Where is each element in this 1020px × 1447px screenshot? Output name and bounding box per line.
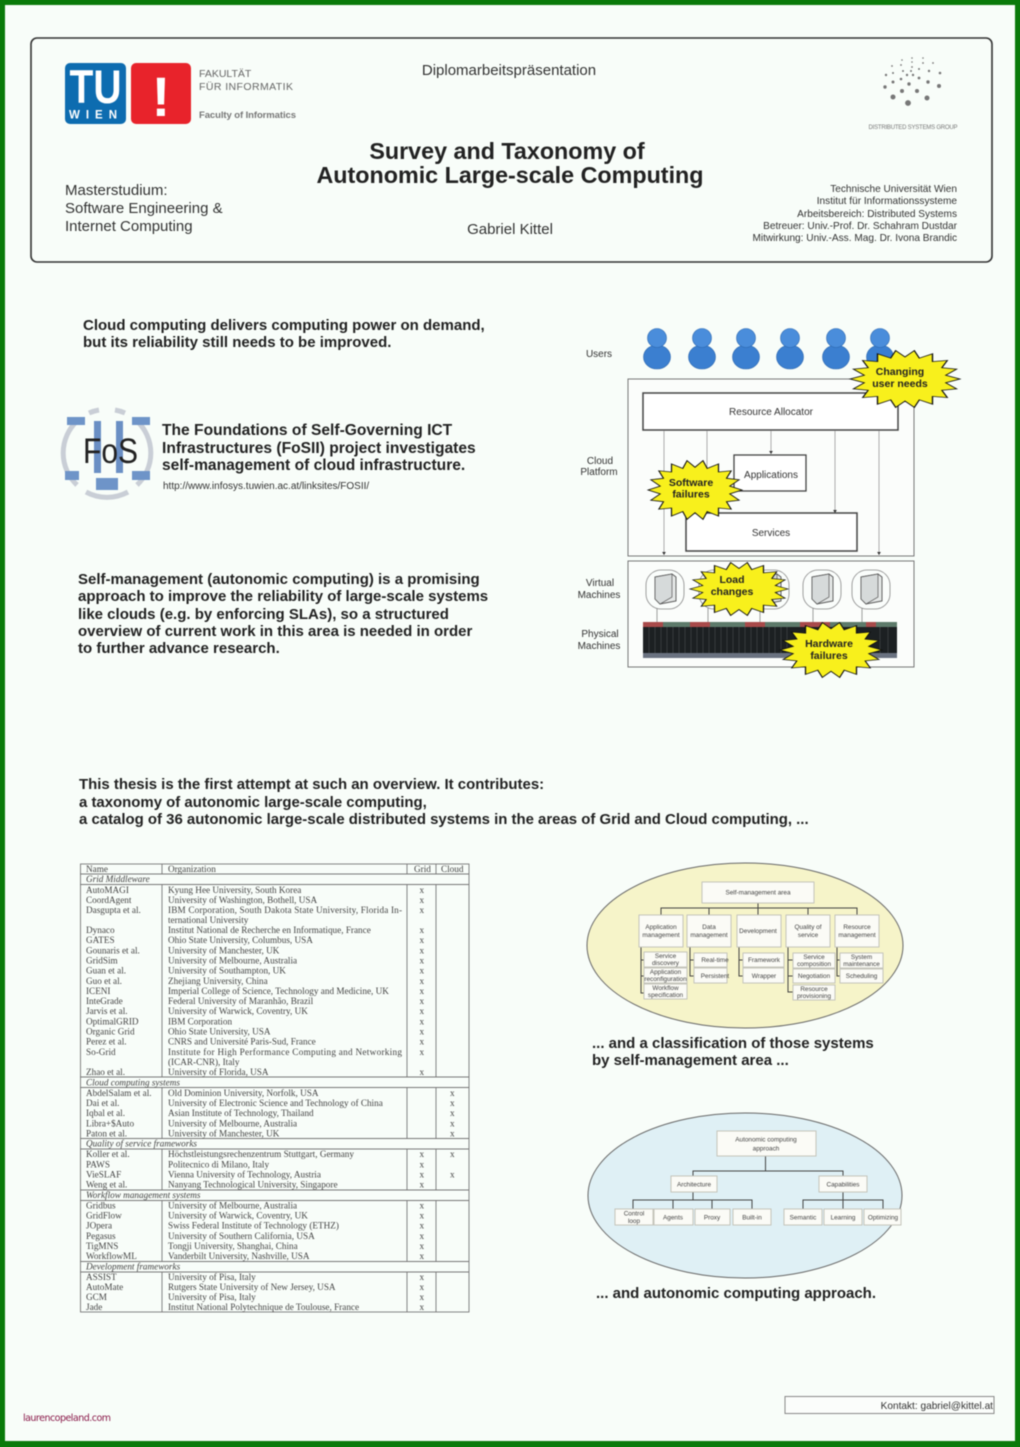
capabilities items: Learning bbox=[831, 1214, 856, 1222]
category boxes: Quality of bbox=[794, 924, 822, 931]
section: cloud computing systems: Asian Institute of Technology, Thailand bbox=[168, 1108, 314, 1118]
intro text: but its reliability still needs to be improved. bbox=[83, 334, 391, 351]
category boxes: management bbox=[838, 932, 876, 939]
callout: hardware failures: Hardware bbox=[805, 638, 853, 650]
self-management text: like clouds (e.g. by enforcing SLAs), so a structured bbox=[78, 606, 449, 623]
section: grid middleware: Ohio State University, Columbus, USA bbox=[168, 935, 313, 945]
application management items: specification bbox=[648, 992, 684, 999]
section: grid middleware: x bbox=[420, 1016, 424, 1026]
architecture items: loop bbox=[628, 1218, 640, 1225]
section: workflow management systems: University of Melbourne, Australia bbox=[168, 1200, 297, 1210]
root box bbox=[717, 1131, 816, 1156]
application management items: Workflow bbox=[652, 985, 679, 992]
section: development frameworks: AutoMate bbox=[86, 1282, 123, 1292]
section: cloud computing systems: Libra+$Auto bbox=[86, 1118, 134, 1128]
section: workflow management systems: x bbox=[420, 1210, 424, 1220]
FoSII project description: self-management of cloud infrastructure. bbox=[162, 457, 465, 474]
section: cloud computing systems: Iqbal et al. bbox=[86, 1108, 125, 1118]
section: development frameworks: x bbox=[420, 1272, 424, 1282]
panel: cloud platform bbox=[628, 379, 914, 556]
quality of service items: provisioning bbox=[797, 993, 831, 1000]
section: grid middleware: IBM Corporation, South Dakota State University, Florida In- bbox=[168, 905, 402, 915]
category boxes: management bbox=[690, 932, 728, 939]
branch boxes: Capabilities bbox=[826, 1182, 860, 1188]
application management items: discovery bbox=[652, 960, 680, 967]
title bbox=[316, 138, 704, 188]
row labels: Machines bbox=[578, 590, 620, 601]
institute and supervisors: Mitwirkung: Univ.-Ass. Mag. Dr. Ivona Brandic bbox=[752, 233, 957, 244]
intro text: Cloud computing delivers computing power on demand, bbox=[83, 317, 485, 334]
section: grid middleware: Grid Middleware bbox=[86, 874, 150, 884]
section: cloud computing systems: University of Manchester, UK bbox=[168, 1128, 280, 1138]
section: quality of service frameworks: x bbox=[450, 1149, 455, 1159]
section: quality of service frameworks: x bbox=[420, 1170, 424, 1180]
section: grid middleware: University of Washington, Bothell, USA bbox=[168, 895, 318, 905]
section: cloud computing systems bbox=[86, 1078, 455, 1138]
resource management items bbox=[840, 953, 883, 983]
section: quality of service frameworks: x bbox=[420, 1180, 424, 1190]
section: grid middleware: x bbox=[420, 946, 424, 956]
title: Autonomic Large-scale Computing bbox=[316, 162, 704, 188]
section: quality of service frameworks: Weng et al. bbox=[86, 1180, 127, 1190]
category boxes bbox=[639, 915, 879, 947]
section: grid middleware: Kyung Hee University, South Korea bbox=[168, 885, 301, 895]
section: development frameworks: Institut National Polytechnique de Toulouse, France bbox=[168, 1302, 359, 1312]
section: workflow management systems: JOpera bbox=[86, 1220, 112, 1230]
study programme: Masterstudium: bbox=[65, 182, 168, 199]
section: grid middleware: Dasgupta et al. bbox=[86, 905, 141, 915]
category boxes: Development bbox=[739, 928, 777, 935]
faculty name: FÜR INFORMATIK bbox=[199, 81, 293, 93]
section: grid middleware: OptimalGRID bbox=[86, 1016, 139, 1026]
section: grid middleware: x bbox=[420, 935, 424, 945]
section: workflow management systems: x bbox=[420, 1231, 424, 1241]
table: catalog of systems bbox=[80, 864, 469, 1312]
self-management text: approach to improve the reliability of large-scale systems bbox=[78, 588, 488, 605]
section: grid middleware: Federal University of Maranhão, Brazil bbox=[168, 996, 314, 1006]
section: grid middleware: University of Warwick, Coventry, UK bbox=[168, 1006, 308, 1016]
section: grid middleware: Zhao et al. bbox=[86, 1067, 125, 1077]
section: cloud computing systems: University of Electronic Science and Technology of China bbox=[168, 1098, 383, 1108]
section: development frameworks: Development frameworks bbox=[85, 1262, 181, 1272]
section: development frameworks: ASSIST bbox=[86, 1272, 117, 1282]
section: quality of service frameworks: Koller et al. bbox=[86, 1149, 130, 1159]
capabilities items bbox=[784, 1209, 901, 1225]
table grid bbox=[80, 864, 469, 1312]
section: grid middleware: x bbox=[420, 966, 424, 976]
section: development frameworks bbox=[85, 1262, 424, 1312]
section: development frameworks: Jade bbox=[86, 1302, 102, 1312]
section: workflow management systems: TigMNS bbox=[86, 1241, 118, 1251]
data management items: Real-time bbox=[701, 957, 729, 964]
callout: load changes: Load bbox=[719, 574, 745, 586]
section: quality of service frameworks bbox=[86, 1138, 455, 1190]
section: development frameworks: x bbox=[420, 1282, 424, 1292]
section: grid middleware: (ICAR-CNR), Italy bbox=[168, 1057, 240, 1067]
table header: Organization bbox=[168, 864, 216, 874]
callout: hardware failures: failures bbox=[810, 650, 848, 662]
caption: classification: ... and a classification of those systems bbox=[592, 1035, 874, 1052]
section: grid middleware: IBM Corporation bbox=[168, 1016, 232, 1026]
thesis contribution text bbox=[79, 776, 809, 828]
section: cloud computing systems: Dai et al. bbox=[86, 1098, 119, 1108]
panel: cloud platform: Applications bbox=[744, 470, 798, 481]
caption: classification bbox=[592, 1035, 874, 1069]
row labels: Machines bbox=[578, 641, 620, 652]
watermark: laurencopeland.com bbox=[23, 1413, 111, 1424]
caption: classification: by self-management area ... bbox=[592, 1052, 789, 1069]
section: cloud computing systems: x bbox=[450, 1088, 455, 1098]
section: grid middleware: Dynaco bbox=[86, 925, 115, 935]
panel: cloud platform: Services bbox=[752, 528, 790, 539]
faculty name bbox=[199, 68, 296, 121]
section: quality of service frameworks: x bbox=[450, 1170, 455, 1180]
section: grid middleware: x bbox=[420, 925, 424, 935]
connectors bbox=[641, 903, 857, 993]
development items bbox=[743, 953, 784, 983]
section: grid middleware: Institute for High Performance Computing and Networking bbox=[168, 1047, 402, 1057]
section: grid middleware: Organic Grid bbox=[86, 1026, 135, 1036]
contact box: Kontakt: gabriel@kittel.at bbox=[881, 1401, 993, 1412]
section: quality of service frameworks: Vienna University of Technology, Austria bbox=[168, 1170, 321, 1180]
data management items: Persistent bbox=[701, 973, 729, 980]
section: workflow management systems: x bbox=[420, 1241, 424, 1251]
section: workflow management systems: x bbox=[420, 1200, 424, 1210]
section: grid middleware: Guan et al. bbox=[86, 966, 126, 976]
capabilities items: Semantic bbox=[790, 1214, 817, 1222]
logo: Distributed Systems Group bbox=[868, 57, 958, 131]
title: Survey and Taxonomy of bbox=[369, 138, 645, 164]
section: workflow management systems: Tongji University, Shanghai, China bbox=[168, 1241, 298, 1251]
section: workflow management systems: GridFlow bbox=[86, 1210, 122, 1220]
branch boxes bbox=[671, 1176, 867, 1192]
panel: cloud platform: Resource Allocator bbox=[729, 407, 814, 418]
section: grid middleware: x bbox=[420, 1026, 424, 1036]
section: cloud computing systems: Old Dominion University, Norfolk, USA bbox=[168, 1088, 319, 1098]
document type: Diplomarbeitspräsentation bbox=[422, 62, 596, 79]
section: cloud computing systems: University of Melbourne, Australia bbox=[168, 1118, 297, 1128]
section: grid middleware: University of Melbourne, Australia bbox=[168, 956, 297, 966]
section: grid middleware: x bbox=[420, 956, 424, 966]
section: quality of service frameworks: x bbox=[420, 1160, 424, 1170]
category boxes: Application bbox=[645, 924, 677, 931]
logo: Distributed Systems Group: DISTRIBUTED SYSTEMS GROUP bbox=[868, 125, 958, 131]
row labels: Platform bbox=[580, 467, 618, 478]
architecture items bbox=[615, 1209, 771, 1225]
logo: TU Wien: ! bbox=[152, 65, 170, 128]
table header: Cloud bbox=[441, 864, 464, 874]
resource management items: maintenance bbox=[843, 961, 880, 968]
section: development frameworks: x bbox=[420, 1302, 424, 1312]
author: Gabriel Kittel bbox=[467, 221, 553, 238]
section: workflow management systems bbox=[86, 1190, 424, 1261]
section: grid middleware: x bbox=[420, 996, 424, 1006]
section: quality of service frameworks: VieSLAF bbox=[86, 1170, 121, 1180]
section: workflow management systems: x bbox=[420, 1251, 424, 1261]
data management items bbox=[694, 953, 729, 983]
section: quality of service frameworks: Höchstleistungsrechenzentrum Stuttgart, Germany bbox=[168, 1149, 354, 1159]
institute and supervisors: Technische Universität Wien bbox=[830, 184, 957, 195]
section: grid middleware: Guo et al. bbox=[86, 976, 122, 986]
section: grid middleware: Perez et al. bbox=[86, 1036, 127, 1046]
section: workflow management systems: Vanderbilt University, Nashville, USA bbox=[168, 1251, 310, 1261]
section: cloud computing systems: x bbox=[450, 1098, 455, 1108]
category boxes: management bbox=[642, 932, 680, 939]
callout: software failures: failures bbox=[672, 488, 710, 500]
section: grid middleware: Institut National de Recherche en Informatique, France bbox=[168, 925, 371, 935]
section: workflow management systems: Gridbus bbox=[86, 1200, 116, 1210]
section: quality of service frameworks: PAWS bbox=[86, 1160, 110, 1170]
FoSII project description: Infrastructures (FoSII) project investigates bbox=[162, 440, 476, 457]
section: development frameworks: University of Pisa, Italy bbox=[168, 1272, 256, 1282]
quality of service items: Service bbox=[803, 954, 825, 961]
section: grid middleware: x bbox=[420, 885, 424, 895]
callout: hardware failures bbox=[780, 623, 882, 677]
section: grid middleware: x bbox=[420, 1036, 424, 1046]
study programme: Software Engineering & bbox=[65, 200, 223, 217]
section: workflow management systems: Swiss Federal Institute of Technology (ETHZ) bbox=[168, 1220, 339, 1230]
section: grid middleware: AutoMAGI bbox=[86, 885, 129, 895]
logo: TU Wien: WIEN bbox=[69, 110, 123, 122]
section: grid middleware bbox=[86, 874, 424, 1077]
architecture items: Control bbox=[624, 1210, 644, 1218]
section: workflow management systems: Workflow management systems bbox=[86, 1190, 201, 1200]
section: development frameworks: GCM bbox=[86, 1292, 107, 1302]
icons: users bbox=[644, 328, 894, 369]
self-management text: to further advance research. bbox=[78, 640, 280, 657]
resource management items: Scheduling bbox=[846, 973, 878, 980]
application management items: Application bbox=[650, 969, 682, 976]
section: grid middleware: x bbox=[420, 986, 424, 996]
self-management text: overview of current work in this area is needed in order bbox=[78, 623, 472, 640]
row labels: Cloud bbox=[587, 456, 613, 467]
section: grid middleware: Zhejiang University, China bbox=[168, 976, 268, 986]
section: workflow management systems: University of Warwick, Coventry, UK bbox=[168, 1210, 308, 1220]
section: grid middleware: ICENI bbox=[86, 986, 110, 996]
self-management text bbox=[78, 571, 488, 657]
section: grid middleware: GridSim bbox=[86, 956, 118, 966]
branch boxes: Architecture bbox=[677, 1182, 711, 1188]
header panel bbox=[31, 38, 992, 262]
section: quality of service frameworks: Quality of service frameworks bbox=[86, 1138, 197, 1148]
quality of service items: composition bbox=[797, 961, 831, 968]
section: cloud computing systems: Cloud computing systems bbox=[86, 1078, 180, 1088]
root box: approach bbox=[753, 1146, 780, 1152]
section: quality of service frameworks: Nanyang Technological University, Singapore bbox=[168, 1180, 338, 1190]
section: grid middleware: GATES bbox=[86, 935, 115, 945]
quality of service items bbox=[793, 953, 835, 1000]
section: grid middleware: Ohio State University, USA bbox=[168, 1026, 271, 1036]
architecture items: Built-in bbox=[742, 1214, 762, 1222]
section: grid middleware: University of Southampton, UK bbox=[168, 966, 286, 976]
diagram: cloud architecture bbox=[578, 328, 960, 677]
resource management items: System bbox=[851, 954, 872, 961]
section: development frameworks: x bbox=[420, 1292, 424, 1302]
thesis contribution text: a catalog of 36 autonomic large-scale distributed systems in the areas of Grid and Cloud computing, ... bbox=[79, 811, 809, 828]
callout: load changes: changes bbox=[711, 586, 753, 598]
section: grid middleware: Gounaris et al. bbox=[86, 946, 140, 956]
self-management text: Self-management (autonomic computing) is a promising bbox=[78, 571, 480, 588]
callout: changing user needs: Changing bbox=[876, 366, 924, 378]
root box: Self-management area bbox=[725, 890, 791, 896]
logo: TU Wien: TU bbox=[70, 60, 122, 113]
root box: Autonomic computing bbox=[735, 1136, 797, 1144]
development items: Framework bbox=[748, 957, 781, 964]
FoSII project description bbox=[162, 422, 476, 492]
application management items bbox=[644, 952, 687, 999]
section: development frameworks: Rutgers State University of New Jersey, USA bbox=[168, 1282, 336, 1292]
connectors bbox=[633, 1156, 883, 1209]
section: development frameworks: University of Pisa, Italy bbox=[168, 1292, 256, 1302]
section: grid middleware: x bbox=[420, 905, 424, 915]
section: cloud computing systems: AbdelSalam et al. bbox=[86, 1088, 152, 1098]
section: cloud computing systems: x bbox=[450, 1128, 455, 1138]
category boxes: Resource bbox=[843, 924, 871, 931]
root box bbox=[702, 882, 814, 903]
thesis contribution text: a taxonomy of autonomic large-scale computing, bbox=[79, 794, 427, 811]
application management items: Service bbox=[655, 953, 677, 960]
thesis contribution text: This thesis is the first attempt at such an overview. It contributes: bbox=[79, 776, 544, 793]
architecture items: Agents bbox=[663, 1214, 683, 1222]
section: quality of service frameworks: Politecnico di Milano, Italy bbox=[168, 1160, 269, 1170]
section: grid middleware: So-Grid bbox=[86, 1047, 116, 1057]
logo: TU Wien bbox=[65, 60, 191, 128]
callout: software failures: Software bbox=[669, 477, 713, 489]
FoSII project description: http://www.infosys.tuwien.ac.at/linksites/FOSII/ bbox=[163, 481, 369, 492]
section: workflow management systems: WorkflowML bbox=[86, 1251, 137, 1261]
faculty name: Faculty of Informatics bbox=[199, 110, 296, 121]
intro text bbox=[83, 317, 485, 351]
callout: software failures bbox=[648, 461, 742, 519]
capabilities items: Optimizing bbox=[868, 1214, 899, 1222]
institute and supervisors bbox=[752, 184, 958, 244]
callout: load changes bbox=[690, 563, 788, 615]
callout: changing user needs: user needs bbox=[872, 378, 928, 390]
FoSII project description: The Foundations of Self-Governing ICT bbox=[162, 422, 453, 439]
row labels: Users bbox=[586, 349, 612, 360]
institute and supervisors: Arbeitsbereich: Distributed Systems bbox=[797, 209, 957, 220]
institute and supervisors: Institut für Informationssysteme bbox=[817, 196, 957, 207]
icon: FoSII logo bbox=[63, 410, 151, 497]
development items: Wrapper bbox=[752, 973, 777, 980]
section: quality of service frameworks: x bbox=[420, 1149, 424, 1159]
section: grid middleware: Imperial College of Science, Technology and Medicine, UK bbox=[168, 986, 389, 996]
section: grid middleware: University of Florida, USA bbox=[168, 1067, 269, 1077]
table header bbox=[86, 864, 464, 874]
section: workflow management systems: University of Southern California, USA bbox=[168, 1231, 315, 1241]
architecture items: Proxy bbox=[704, 1214, 721, 1222]
institute and supervisors: Betreuer: Univ.-Prof. Dr. Schahram Dustdar bbox=[763, 221, 958, 232]
table header: Grid bbox=[414, 864, 431, 874]
row labels: Physical bbox=[581, 629, 619, 640]
study programme bbox=[65, 182, 223, 235]
table header: Name bbox=[86, 864, 108, 874]
row labels bbox=[578, 349, 620, 652]
section: grid middleware: x bbox=[420, 976, 424, 986]
icon: FoSII logo: FoS bbox=[83, 432, 138, 471]
category boxes: Data bbox=[702, 924, 716, 931]
quality of service items: Resource bbox=[800, 986, 828, 993]
section: grid middleware: InteGrade bbox=[86, 996, 123, 1006]
row labels: Virtual bbox=[586, 578, 614, 589]
quality of service items: Negotiation bbox=[798, 973, 831, 980]
application management items: reconfiguration bbox=[644, 976, 687, 983]
panel: virtual and physical machines bbox=[628, 561, 914, 667]
category boxes: service bbox=[798, 932, 819, 939]
callout: changing user needs bbox=[850, 351, 960, 407]
faculty name: FAKULTÄT bbox=[199, 68, 252, 80]
section: grid middleware: x bbox=[420, 1047, 424, 1057]
diagram: autonomic computing approach bbox=[588, 1113, 902, 1278]
section: cloud computing systems: Paton et al. bbox=[86, 1128, 127, 1138]
caption: autonomic approach: ... and autonomic computing approach. bbox=[596, 1285, 876, 1302]
section: workflow management systems: Pegasus bbox=[86, 1231, 116, 1241]
contact box bbox=[785, 1396, 994, 1414]
section: grid middleware: x bbox=[420, 1067, 424, 1077]
section: cloud computing systems: x bbox=[450, 1118, 455, 1128]
diagram: self-management area classification bbox=[587, 863, 903, 1028]
section: grid middleware: x bbox=[420, 1006, 424, 1016]
section: grid middleware: CNRS and Université Paris-Sud, France bbox=[168, 1036, 316, 1046]
study programme: Internet Computing bbox=[65, 218, 193, 235]
section: grid middleware: CoordAgent bbox=[86, 895, 132, 905]
section: workflow management systems: x bbox=[420, 1220, 424, 1230]
section: grid middleware: University of Manchester, UK bbox=[168, 946, 280, 956]
section: grid middleware: x bbox=[420, 895, 424, 905]
section: grid middleware: Jarvis et al. bbox=[86, 1006, 128, 1016]
section: cloud computing systems: x bbox=[450, 1108, 455, 1118]
section: grid middleware: ternational University bbox=[168, 915, 249, 925]
